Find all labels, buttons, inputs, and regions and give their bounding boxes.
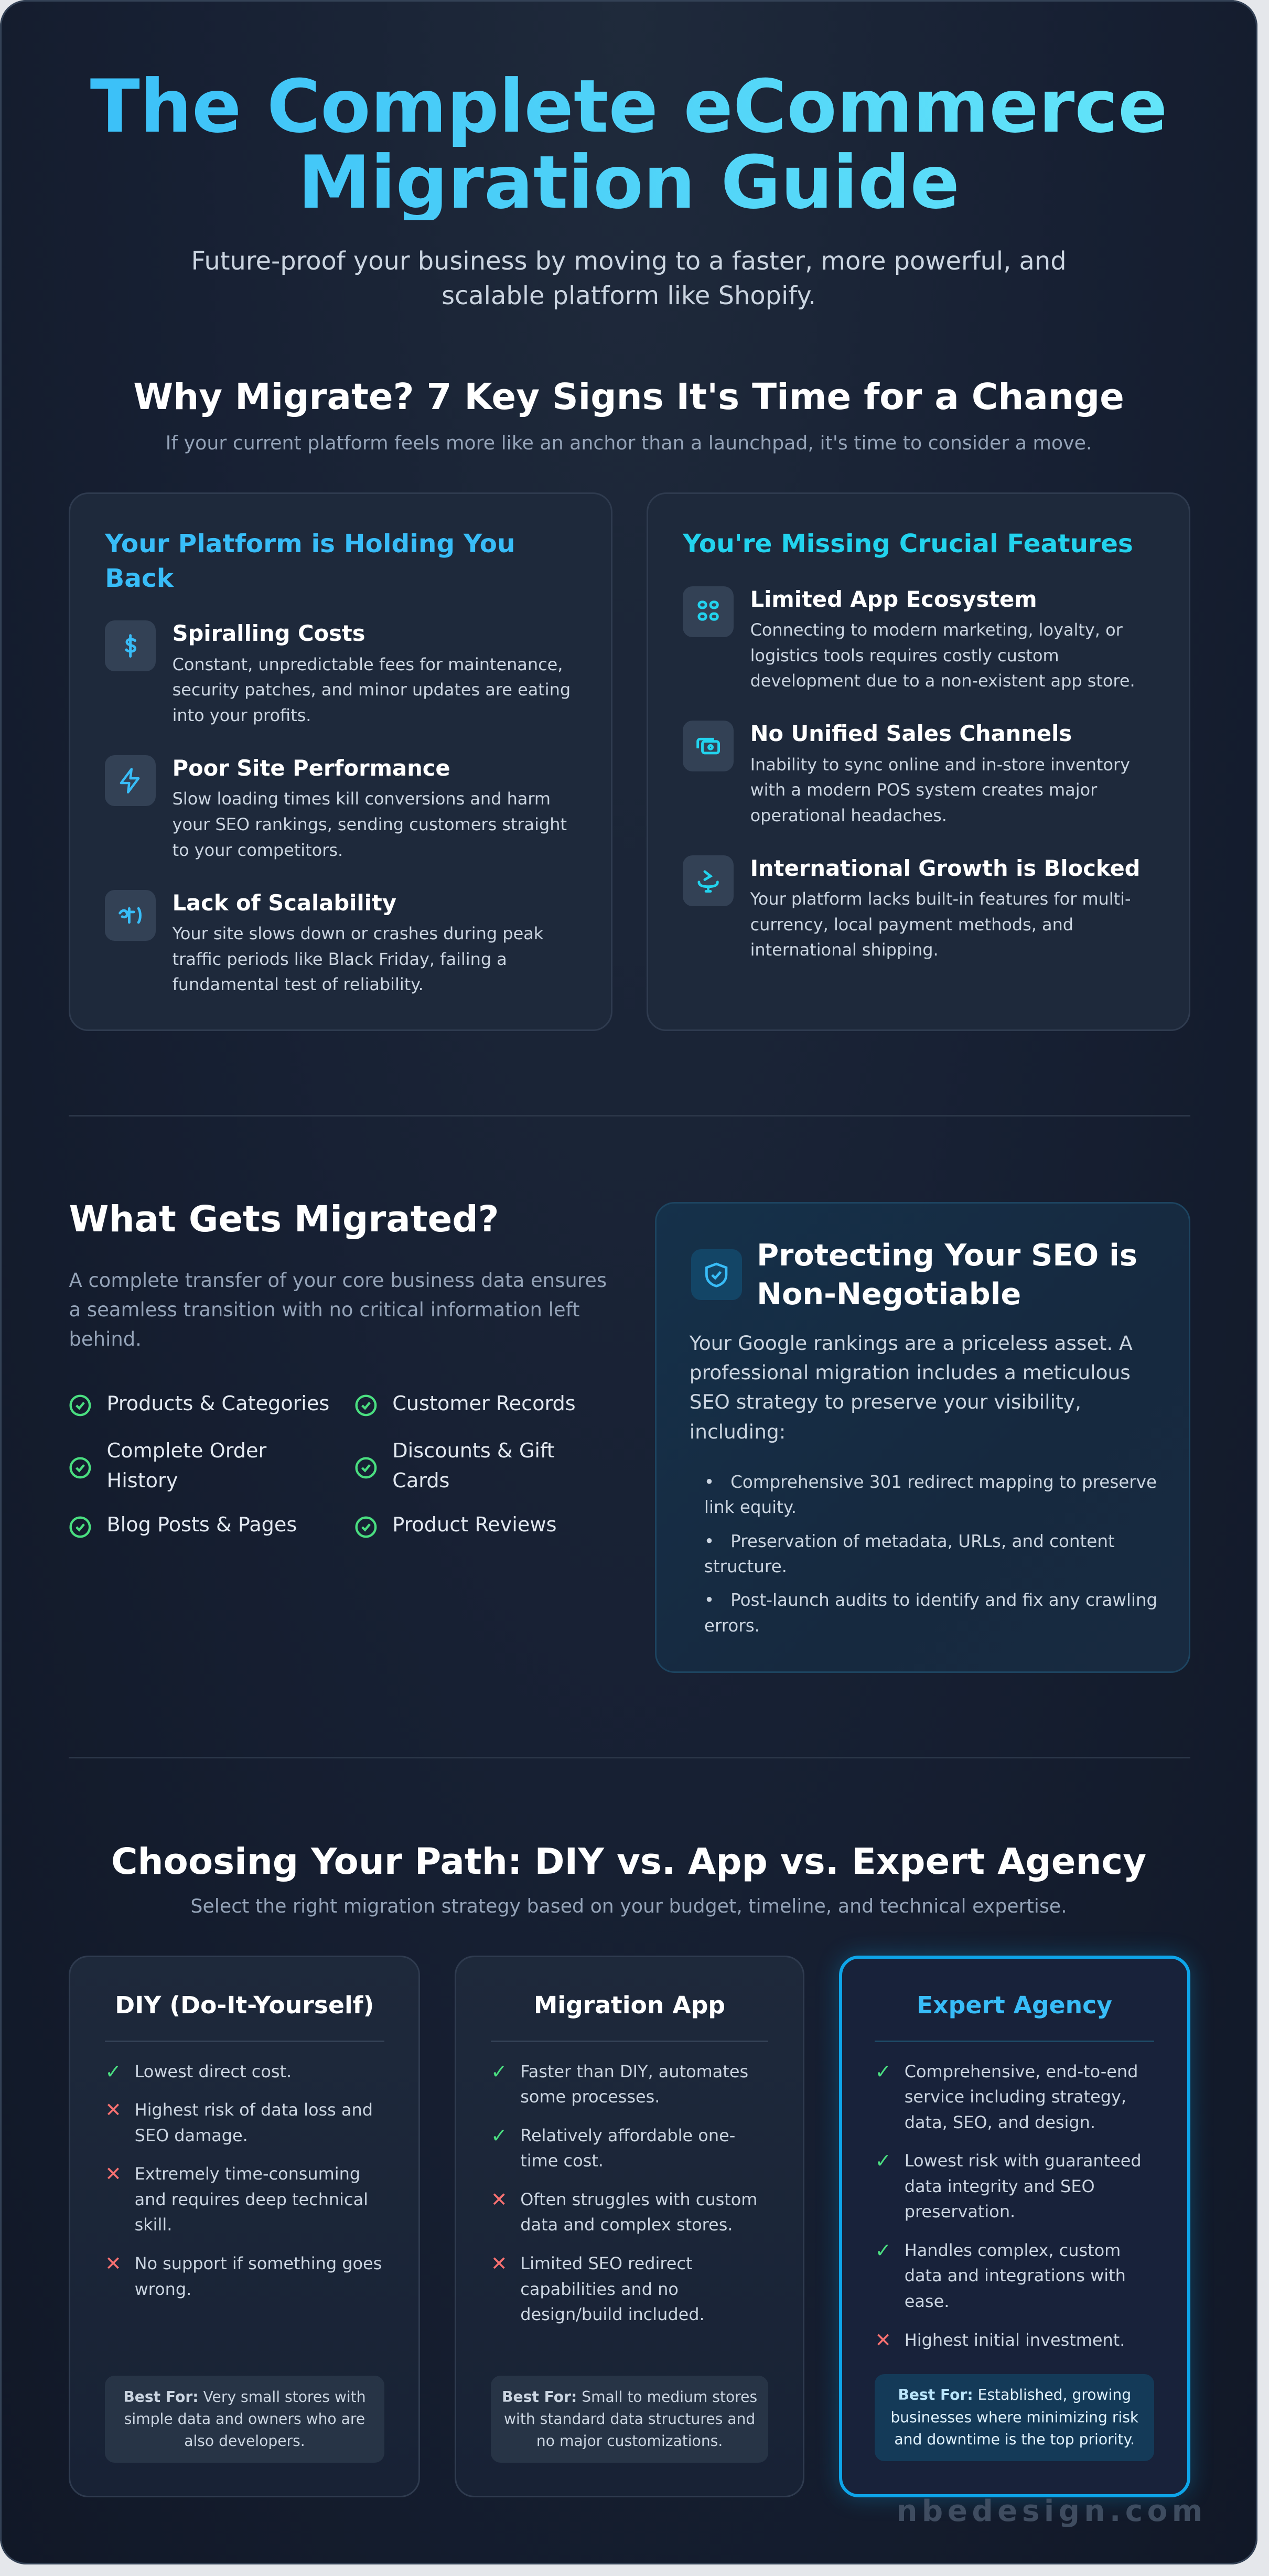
item: scalability: [105, 890, 543, 994]
list: agency pros and cons: ✓: [875, 2149, 891, 2172]
list: DIY pros and cons: No support if something goes wrong.: [135, 2253, 382, 2299]
checklist: migrated items: Products & Categories: [106, 1392, 329, 1415]
callout: app best for: [491, 2376, 768, 2463]
subtitle: scalable platform like Shopify.: [442, 282, 816, 310]
item: spiralling costs: Spiralling Costs: [173, 620, 365, 646]
list: agency pros and cons: ✓: [875, 2239, 891, 2262]
list: app pros and cons: Faster than DIY, automates some processes.: [520, 2062, 748, 2107]
panel title: [757, 1238, 1137, 1312]
list: app pros and cons: ✓: [491, 2124, 507, 2147]
list: app pros and cons: ✕: [491, 2188, 507, 2211]
item: poor performance: [105, 755, 567, 860]
checklist: migrated items: [69, 1392, 576, 1538]
list: app pros and cons: ✓: [491, 2060, 507, 2083]
list: agency pros and cons: Lowest risk with guaranteed data integrity and SEO preservation.: [905, 2151, 1142, 2221]
checklist: migrated items: Complete Order: [106, 1440, 266, 1463]
title: [0, 69, 1257, 220]
item: poor performance: Slow loading times kill conversions and harm your SEO rankings, sending customers straight to your competitors.: [173, 789, 567, 860]
list: app pros and cons: ✕: [491, 2252, 507, 2275]
panel: migration app: [455, 1956, 804, 2497]
callout: agency best for: [875, 2374, 1154, 2461]
list: DIY pros and cons: Lowest direct cost.: [135, 2062, 292, 2081]
subtitle: [191, 247, 1067, 310]
item: scalability: Lack of Scalability: [173, 890, 396, 916]
list: SEO measures: • Comprehensive 301 redirect mapping to preserve link equity.: [704, 1472, 1157, 1517]
panel title: Expert Agency: [917, 1991, 1112, 2019]
icon: dollar: [105, 620, 156, 671]
checklist: migrated items: Customer Records: [392, 1392, 576, 1415]
panel: SEO protection: [655, 1202, 1190, 1673]
item: app ecosystem: [683, 586, 1135, 691]
list: DIY pros and cons: [105, 2060, 382, 2299]
panel title: Non-Negotiable: [757, 1276, 1021, 1312]
item: sales channels: No Unified Sales Channels: [750, 721, 1072, 746]
list: DIY pros and cons: ✕: [105, 2162, 122, 2185]
panel: platform holding you back: [69, 492, 612, 1031]
panel title: Back: [105, 564, 174, 593]
item: sales channels: Inability to sync online and in-store inventory with a modern POS system creates major operational headaches.: [750, 755, 1130, 825]
item: poor performance: Poor Site Performance: [173, 755, 450, 781]
list: app pros and cons: Often struggles with custom data and complex stores.: [520, 2189, 757, 2235]
item: international: International Growth is Blocked: [750, 855, 1140, 881]
checklist: migrated items: History: [106, 1469, 178, 1493]
icon: shield: [691, 1249, 742, 1300]
panel title: You're Missing Crucial Features: [683, 529, 1133, 559]
list: DIY pros and cons: Extremely time-consuming and requires deep technical skill.: [135, 2164, 368, 2235]
heading: what gets migrated: What Gets Migrated?: [69, 1198, 499, 1240]
icon: scale: [105, 890, 156, 941]
list: agency pros and cons: ✓: [875, 2060, 891, 2083]
callout: app best for: Best For: Small to medium stores with standard data structures and no major customizations.: [502, 2388, 757, 2450]
subheading: choosing path: Select the right migration strategy based on your budget, timeline, and technical expertise.: [190, 1895, 1067, 1917]
list: agency pros and cons: ✕: [875, 2328, 891, 2352]
title: The Complete eCommerce: [90, 64, 1167, 149]
icon: lightning: [105, 755, 156, 806]
panel: expert agency: [839, 1956, 1190, 2497]
list: SEO measures: [704, 1472, 1157, 1636]
heading: choosing path: Choosing Your Path: DIY vs. App vs. Expert Agency: [111, 1841, 1146, 1883]
list: agency pros and cons: Highest initial investment.: [905, 2330, 1125, 2349]
list: SEO measures: • Post-launch audits to identify and fix any crawling errors.: [704, 1590, 1157, 1636]
panel title: DIY (Do-It-Yourself): [115, 1991, 374, 2019]
item: app ecosystem: Connecting to modern marketing, loyalty, or logistics tools requires costly custom development due to a non-existent app store.: [750, 620, 1135, 691]
icon: grid: [683, 586, 734, 637]
checklist: migrated items: Cards: [392, 1469, 449, 1493]
panel title: Migration App: [534, 1991, 725, 2019]
item: spiralling costs: [105, 620, 571, 725]
list: app pros and cons: Relatively affordable one-time cost.: [520, 2126, 735, 2171]
panel: missing features: [647, 492, 1190, 1031]
subheading: why migrate: If your current platform feels more like an anchor than a launchpad, it's time to consider a move.: [166, 432, 1092, 454]
item: international: [683, 855, 1140, 960]
text: SEO intro: Your Google rankings are a priceless asset. A professional migration includes a meticulous SEO strategy to preserve your visibility, including:: [690, 1332, 1133, 1443]
item: app ecosystem: Limited App Ecosystem: [750, 586, 1037, 612]
item: scalability: Your site slows down or crashes during peak traffic periods like Black Friday, failing a fundamental test of reliability.: [173, 924, 543, 994]
text: migration description: A complete transfer of your core business data ensures a seamless transition with no critical information left behind.: [69, 1269, 607, 1350]
checklist: migrated items: Blog Posts & Pages: [106, 1514, 297, 1537]
list: agency pros and cons: [875, 2060, 1142, 2352]
list: app pros and cons: Limited SEO redirect capabilities and no design/build included.: [520, 2253, 705, 2324]
title: Migration Guide: [298, 139, 960, 224]
item: international: Your platform lacks built-in features for multi-currency, local payment methods, and international shipping.: [750, 889, 1131, 960]
panel title: Protecting Your SEO is: [757, 1238, 1137, 1273]
heading: why migrate: Why Migrate? 7 Key Signs It's Time for a Change: [133, 376, 1124, 418]
panel: DIY: [69, 1956, 420, 2497]
item: spiralling costs: Constant, unpredictable fees for maintenance, security patches, and minor updates are eating into your profits.: [173, 654, 571, 725]
callout: DIY best for: Best For: Very small stores with simple data and owners who are also developers.: [123, 2388, 366, 2450]
checklist: migrated items: Discounts & Gift: [392, 1440, 555, 1463]
icon: shipping: [683, 855, 734, 906]
callout: agency best for: Best For: Established, growing businesses where minimizing risk and downtime is the top priority.: [890, 2386, 1138, 2448]
item: sales channels: [683, 721, 1130, 825]
list: DIY pros and cons: Highest risk of data loss and SEO damage.: [135, 2100, 373, 2145]
list: agency pros and cons: Comprehensive, end-to-end service including strategy, data, SEO, and design.: [905, 2062, 1138, 2132]
subtitle: Future-proof your business by moving to a faster, more powerful, and: [191, 247, 1067, 276]
list: DIY pros and cons: ✕: [105, 2252, 122, 2275]
list: app pros and cons: [491, 2060, 757, 2324]
panel title: [105, 529, 515, 593]
list: agency pros and cons: Handles complex, custom data and integrations with ease.: [905, 2240, 1126, 2311]
callout: DIY best for: [105, 2376, 384, 2463]
list: SEO measures: • Preservation of metadata, URLs, and content structure.: [704, 1531, 1115, 1576]
icon: cash: [683, 721, 734, 771]
list: DIY pros and cons: ✓: [105, 2060, 122, 2083]
list: DIY pros and cons: ✕: [105, 2098, 122, 2121]
watermark: nbedesign.com: [896, 2494, 1207, 2528]
checklist: migrated items: Product Reviews: [392, 1514, 557, 1537]
panel title: Your Platform is Holding You: [105, 529, 515, 559]
